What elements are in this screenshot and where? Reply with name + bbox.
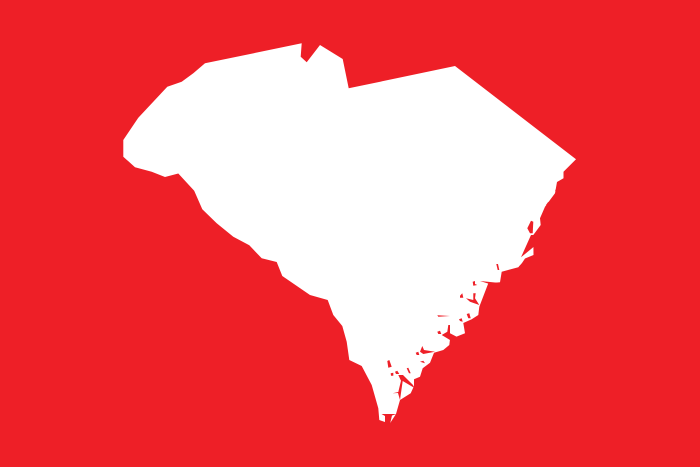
- coastal inlets: red sea-island cuts along the shoreline: [382, 189, 558, 424]
- state silhouette: white South Carolina outline: [123, 43, 576, 423]
